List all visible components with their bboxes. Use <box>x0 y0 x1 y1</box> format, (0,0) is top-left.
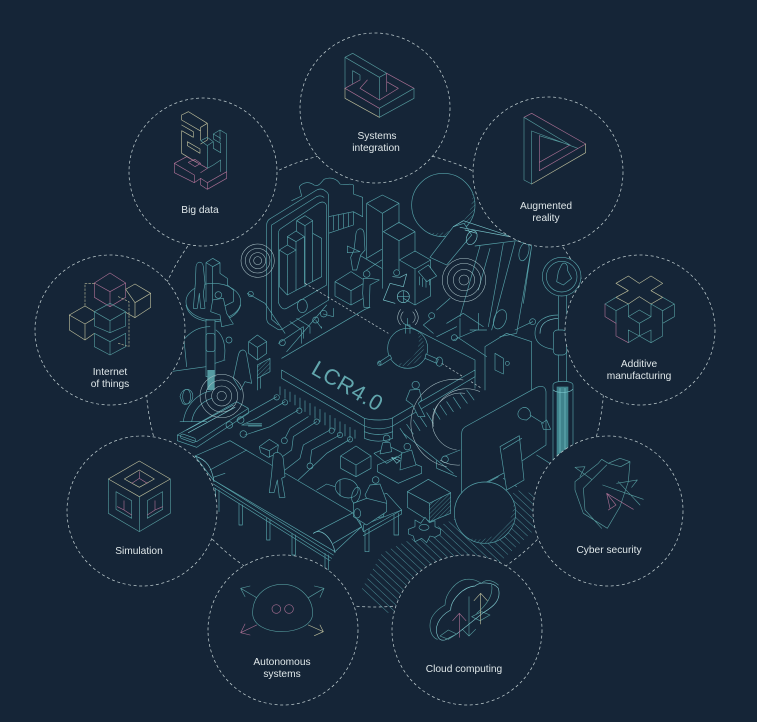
lower half of the illustration <box>177 370 573 570</box>
left platform with tall blocks <box>186 283 241 320</box>
central isometric factory illustration <box>170 173 581 570</box>
panel: autonomous systems: systems <box>263 669 301 680</box>
person with laptop <box>351 229 365 270</box>
conveyor legs <box>216 488 399 570</box>
icon: impossible loop <box>345 53 414 117</box>
chip body <box>282 370 475 441</box>
label: Additive <box>621 359 657 370</box>
panel: autonomous systems <box>208 555 358 705</box>
hatched cube <box>407 479 451 522</box>
monitor panel <box>462 386 546 495</box>
person in wheelchair <box>394 270 400 276</box>
hatched sphere top right <box>412 173 475 237</box>
cube on floor <box>341 446 371 477</box>
panel: additive manufacturing <box>565 255 715 405</box>
tablet <box>267 189 329 330</box>
robot arm <box>430 223 472 265</box>
label: Systems <box>357 131 397 142</box>
label: Cyber security <box>576 545 642 556</box>
small gear <box>408 517 441 543</box>
icon: cloud with arrows <box>430 579 499 640</box>
left machine base <box>177 402 248 447</box>
person on chip corner <box>412 381 419 389</box>
upper half of the illustration <box>170 173 581 390</box>
seated pair on bench <box>374 447 422 483</box>
icon: impossible triangle <box>524 113 586 184</box>
big 3D bar blocks <box>367 195 399 288</box>
table end of conveyor <box>353 493 402 532</box>
panel: cyber security <box>533 436 683 586</box>
chip pins right <box>400 390 474 438</box>
panel: big data <box>129 98 277 246</box>
robot base panel <box>460 241 532 337</box>
right machine <box>485 333 532 390</box>
panel: internet of things <box>35 255 185 405</box>
label: Internet <box>93 367 127 378</box>
chip top edge <box>282 307 475 388</box>
chip title: LCR4.0 <box>308 356 388 416</box>
person carrying box <box>259 439 278 457</box>
panel: augmented reality: reality <box>532 213 560 224</box>
tablet bar chart <box>279 233 322 295</box>
label: Augmented <box>520 201 572 212</box>
icon: 3D cross <box>605 276 674 343</box>
circuit traces top <box>247 293 333 352</box>
panel: augmented reality <box>473 97 623 247</box>
target rings left <box>241 244 274 277</box>
standing person <box>363 271 370 277</box>
label: Simulation <box>115 546 163 557</box>
left disc <box>170 327 225 372</box>
motor <box>333 476 361 501</box>
target rings right <box>442 258 486 302</box>
seated person on platform <box>215 292 222 298</box>
icon: robot blob with arrows <box>241 584 324 636</box>
left support pole <box>206 320 215 377</box>
person at motor <box>372 477 379 483</box>
ground hatching <box>360 490 552 620</box>
bolts on monitor <box>518 407 543 423</box>
label: Autonomous <box>253 657 311 668</box>
panel: simulation <box>67 436 217 586</box>
chip pins left <box>280 387 355 438</box>
outer dashed ring <box>146 149 604 607</box>
right pole with sphere <box>535 315 558 349</box>
label: Big data <box>181 205 219 216</box>
big hatched sphere <box>454 482 516 543</box>
icon: connected cubes <box>69 273 151 355</box>
panel: systems integration: integration <box>352 143 400 154</box>
small stacked boxes <box>249 335 267 360</box>
circuit traces lower left <box>237 397 350 480</box>
panel: cloud computing <box>392 555 542 705</box>
dashed diagonal <box>305 283 482 388</box>
sphere on chip <box>388 328 428 368</box>
lower right pole <box>553 381 573 460</box>
conveyor belt <box>195 441 362 552</box>
panel: systems integration <box>300 33 450 183</box>
target rings lower left <box>200 374 243 418</box>
person near boxes <box>233 350 252 390</box>
woman on platform <box>193 262 205 308</box>
icon: big data blocks <box>174 112 227 189</box>
panel: additive manufacturing: manufacturing <box>607 371 672 382</box>
icon: shield with arrows <box>575 458 643 528</box>
icon: hollow cube <box>108 461 170 532</box>
target rings lower right <box>411 379 480 467</box>
wifi arcs <box>398 309 418 325</box>
label: Cloud computing <box>426 664 503 675</box>
panel: internet of things: of things <box>91 379 129 390</box>
gear behind tablet <box>292 178 363 233</box>
